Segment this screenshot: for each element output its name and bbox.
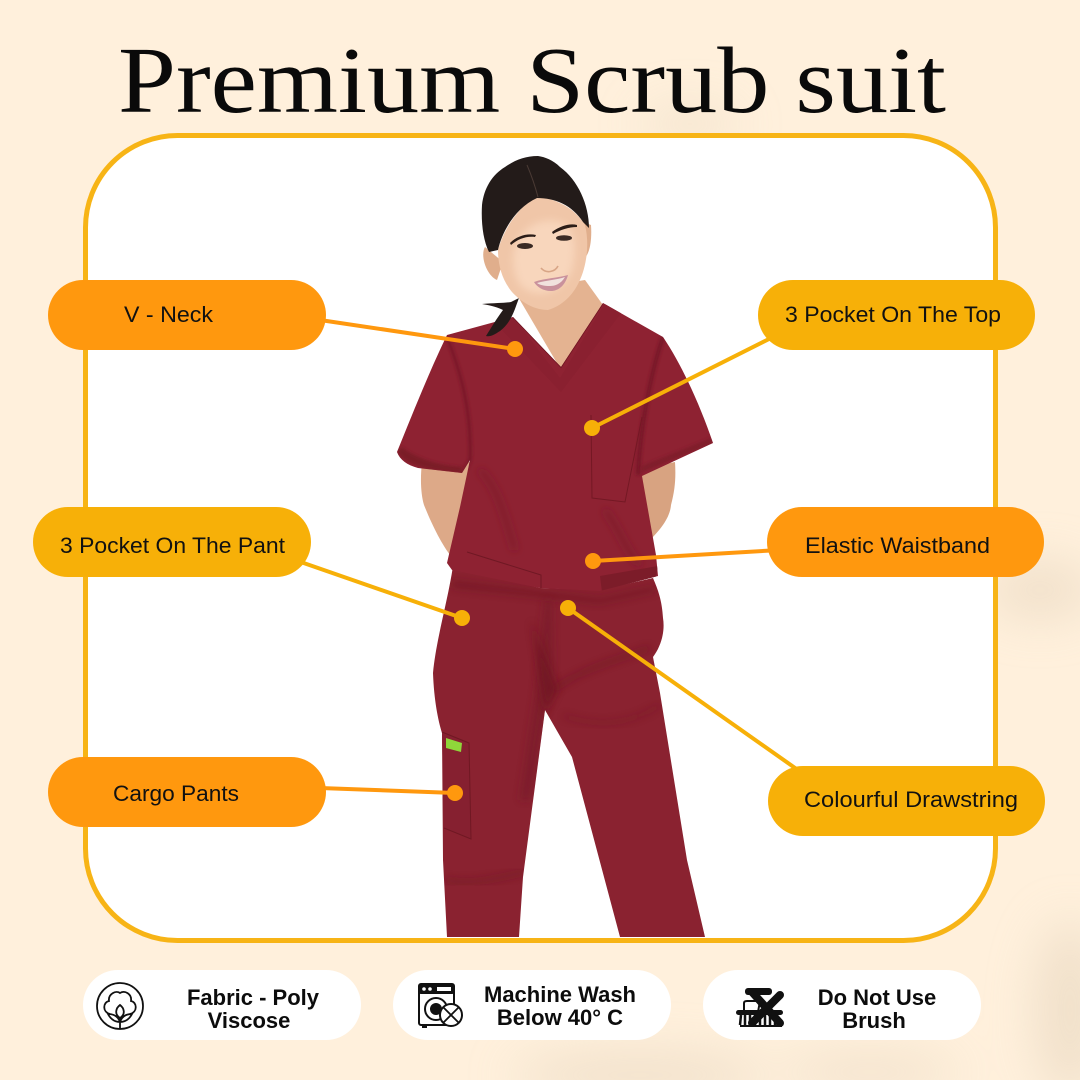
hair	[482, 156, 589, 252]
mouth	[534, 275, 568, 291]
neck	[517, 280, 603, 370]
eyebrows	[510, 234, 536, 245]
connector: 3 Pocket On The Pant	[295, 560, 470, 626]
label: Cargo Pants: Cargo Pants	[113, 781, 239, 806]
face	[498, 197, 587, 310]
brand tag	[446, 738, 462, 752]
shirt	[390, 295, 720, 595]
feature: fabric: Viscose	[208, 1008, 290, 1033]
label: 3 Pocket On The Top: 3 Pocket On The Top	[785, 302, 1001, 327]
nose	[541, 266, 558, 272]
label: Cargo Pants	[48, 757, 326, 827]
feature: fabric: Fabric - Poly	[187, 985, 320, 1010]
label: Colourful Drawstring	[768, 766, 1045, 836]
pants	[425, 560, 715, 940]
cargo pocket	[442, 732, 471, 839]
right arm	[635, 462, 675, 540]
shirt pocket	[591, 415, 642, 502]
label: 3 Pocket On The Pant: 3 Pocket On The Pant	[60, 533, 285, 558]
feature: machine wash	[393, 970, 671, 1040]
connector: Cargo Pants	[320, 785, 463, 801]
connector: 3 Pocket On The Top	[584, 336, 775, 436]
label: Elastic Waistband: Elastic Waistband	[805, 533, 990, 558]
feature: machine wash: Machine Wash	[484, 982, 636, 1007]
head	[482, 156, 591, 310]
label: Colourful Drawstring: Colourful Drawstring	[804, 787, 1018, 812]
connector: Colourful Drawstring	[560, 600, 805, 775]
connector: Elastic Waistband	[585, 550, 780, 569]
panel: product photo frame	[86, 136, 996, 940]
icon: washing machine	[419, 984, 462, 1028]
label: 3 Pocket On The Top	[758, 280, 1035, 350]
label: Elastic Waistband	[767, 507, 1044, 577]
feature: machine wash: Below 40° C	[497, 1005, 623, 1030]
connector: V - Neck	[320, 320, 523, 357]
feature: brush: Do Not Use	[818, 985, 936, 1010]
title: Premium Scrub suit	[118, 29, 946, 133]
icon: no brush	[736, 988, 783, 1026]
eyes	[517, 243, 533, 249]
label: V - Neck	[48, 280, 326, 350]
left arm	[421, 462, 470, 556]
label: 3 Pocket On The Pant	[33, 507, 311, 577]
feature: brush: Brush	[842, 1008, 906, 1033]
ponytail	[482, 298, 519, 336]
feature: brush	[703, 970, 981, 1040]
feature: fabric	[83, 970, 361, 1040]
icon: cotton	[97, 983, 143, 1029]
figure: woman wearing maroon scrub suit	[390, 156, 720, 940]
label: V - Neck: V - Neck	[124, 302, 214, 327]
